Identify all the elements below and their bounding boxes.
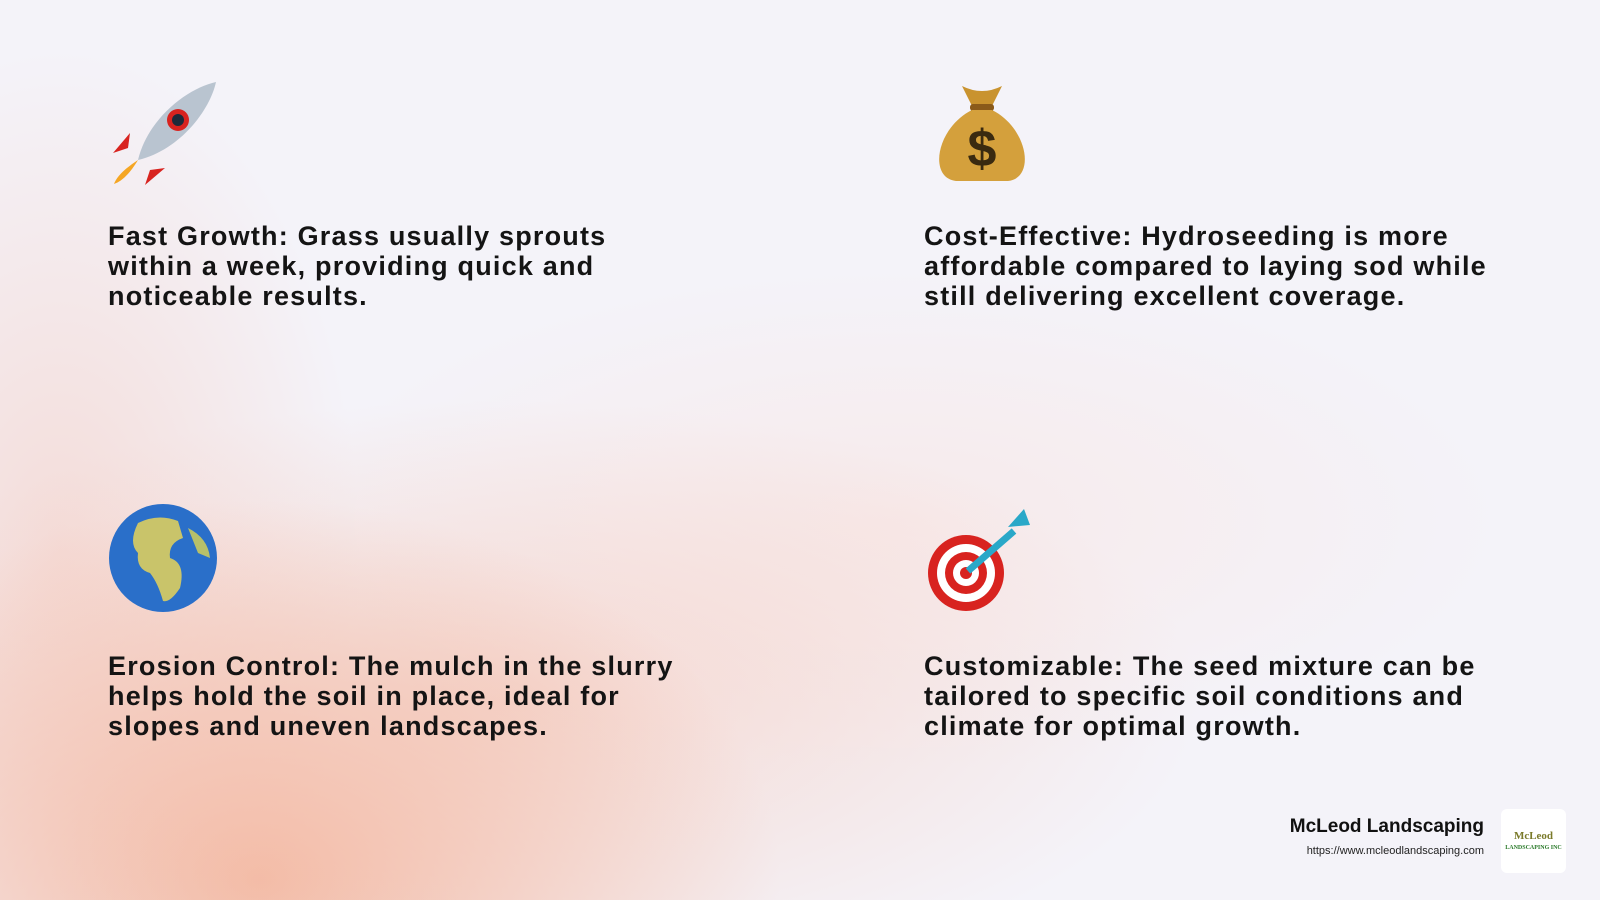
icon: money bag: [939, 86, 1025, 181]
text: erosion control: Erosion Control: The mulch in the slurry: [108, 651, 674, 681]
text: customizable: Customizable: The seed mixture can be: [924, 651, 1476, 681]
logo: LANDSCAPING INC: [1505, 845, 1562, 851]
icon: rocket: [113, 82, 216, 185]
brand name: McLeod Landscaping: [1290, 816, 1484, 837]
text: fast growth: noticeable results.: [108, 281, 368, 311]
logo: McLeod: [1514, 830, 1553, 842]
text: cost-effective: Cost-Effective: Hydroseeding is more: [924, 221, 1449, 251]
text: customizable: climate for optimal growth.: [924, 711, 1301, 741]
footer: brand: [1290, 809, 1566, 873]
text: fast growth: [108, 221, 606, 311]
text: fast growth: Fast Growth: Grass usually sprouts: [108, 221, 606, 251]
panel: cost-effective: [924, 86, 1487, 311]
text: erosion control: helps hold the soil in place, ideal for: [108, 681, 620, 711]
icon: money bag: $: [968, 120, 997, 178]
panel: erosion control: [108, 504, 674, 741]
icon: target: [928, 509, 1030, 611]
text: erosion control: [108, 651, 674, 741]
text: cost-effective: still delivering excellent coverage.: [924, 281, 1405, 311]
panel: fast growth: [108, 82, 606, 311]
text: erosion control: slopes and uneven landscapes.: [108, 711, 548, 741]
logo: [1501, 809, 1566, 873]
text: cost-effective: affordable compared to laying sod while: [924, 251, 1487, 281]
text: customizable: tailored to specific soil conditions and: [924, 681, 1464, 711]
panel: customizable: [924, 509, 1476, 741]
brand url: https://www.mcleodlandscaping.com: [1307, 845, 1484, 857]
icon: globe: [109, 504, 217, 612]
text: customizable: [924, 651, 1476, 741]
text: fast growth: within a week, providing quick and: [108, 251, 594, 281]
text: cost-effective: [924, 221, 1487, 311]
